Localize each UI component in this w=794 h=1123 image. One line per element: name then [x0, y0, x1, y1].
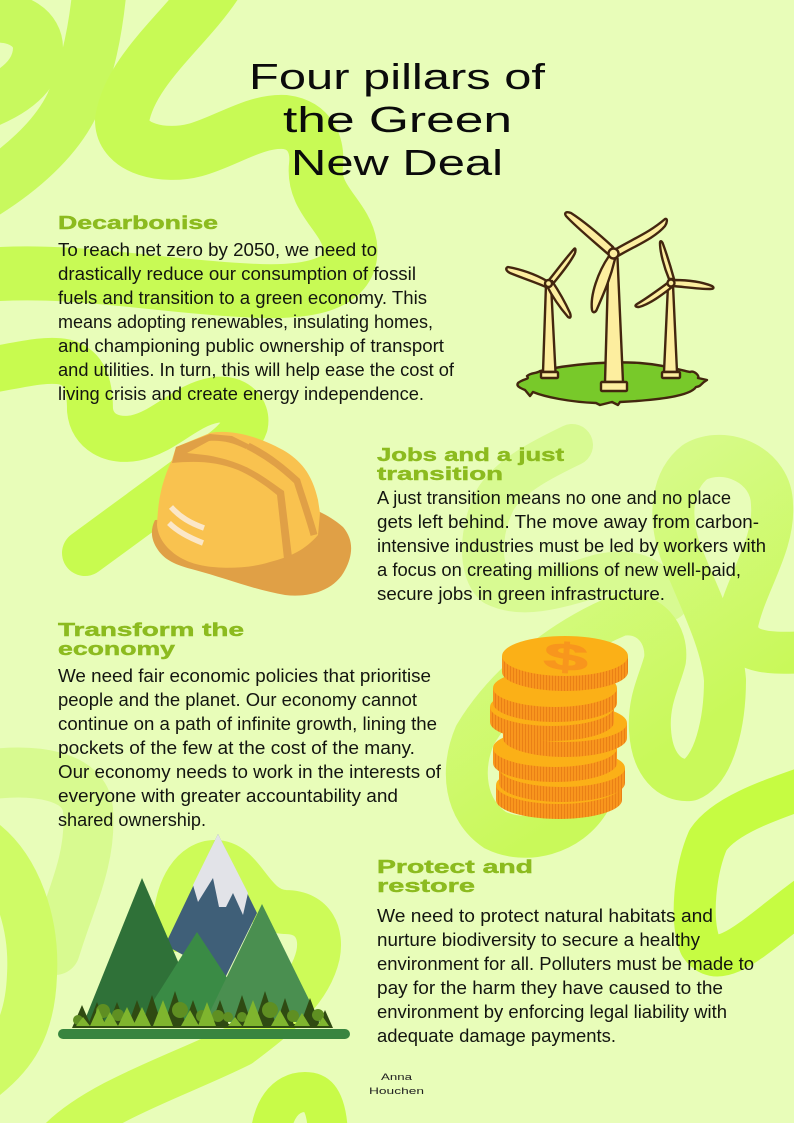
author credit: Houchen	[369, 1086, 424, 1096]
right turbine	[636, 241, 713, 378]
heading: transform the economy: Transform the	[58, 620, 244, 640]
forest	[72, 991, 333, 1028]
heading: protect and restore: Protect and	[377, 857, 533, 877]
author credit: Anna	[381, 1072, 412, 1082]
body: jobs: secure jobs in green infrastructure.	[377, 584, 665, 604]
section: protect and restore	[377, 857, 754, 1046]
coin 7	[496, 766, 622, 819]
body: protect	[377, 906, 754, 1046]
centre turbine	[565, 212, 667, 391]
middle mountain	[140, 932, 256, 1022]
body: protect: environment by enforcing legal liability with	[377, 1002, 727, 1022]
icon: wind turbines	[506, 212, 713, 405]
body: jobs	[377, 488, 766, 604]
body: decarbonise	[58, 240, 455, 404]
coin 5	[493, 729, 617, 782]
body: jobs: A just transition means no one and no place	[377, 488, 731, 508]
heading: protect and restore: restore	[377, 876, 475, 896]
coin 6	[499, 749, 625, 802]
coin 3	[490, 688, 614, 741]
coin 1	[502, 636, 628, 691]
author credit	[369, 1072, 424, 1096]
snow cap	[193, 834, 248, 915]
body: decarbonise: To reach net zero by 2050, we need to	[58, 240, 377, 260]
section: jobs and a just transition	[377, 445, 766, 604]
left mountain	[84, 878, 204, 1022]
icon: hard hat	[152, 432, 351, 596]
body: decarbonise: fuels and transition to a green economy. This	[58, 288, 427, 308]
body: decarbonise: drastically reduce our consumption of fossil	[58, 264, 416, 284]
right mountain	[205, 904, 320, 1022]
body: transform: shared ownership.	[58, 810, 206, 830]
title: the Green	[283, 99, 512, 140]
body: jobs: intensive industries must be led by workers with	[377, 536, 766, 556]
heading: decarbonise: Decarbonise	[58, 213, 218, 233]
body: transform: everyone with greater accountability and	[58, 786, 398, 806]
body: protect: pay for the harm they have caused to the	[377, 978, 723, 998]
body: decarbonise: means adopting renewables, insulating homes,	[58, 312, 433, 332]
body: decarbonise: living crisis and create energy independence.	[58, 384, 424, 404]
heading: jobs and a just transition: transition	[377, 464, 503, 484]
coin 2	[493, 669, 617, 722]
coin 4	[503, 704, 627, 757]
heading: protect and restore	[377, 857, 533, 896]
body: transform: people and the planet. Our economy cannot	[58, 690, 417, 710]
hard hat brim	[152, 512, 351, 596]
hard hat reflection stripes	[169, 507, 204, 543]
body: jobs: a focus on creating millions of new well-paid,	[377, 560, 741, 580]
icon: stack of coins	[490, 634, 628, 819]
heading: transform the economy: economy	[58, 639, 175, 659]
body: protect: adequate damage payments.	[377, 1026, 616, 1046]
hard hat ribs	[172, 434, 314, 559]
title	[249, 56, 546, 183]
icon: mountains and forest	[58, 834, 350, 1039]
title: New Deal	[291, 142, 503, 183]
body: transform: continue on a path of infinite growth, lining the	[58, 714, 437, 734]
body: transform	[58, 666, 442, 830]
hard hat shell	[157, 432, 320, 568]
left turbine	[506, 249, 576, 378]
title: Four pillars of	[249, 56, 546, 97]
heading: jobs and a just transition: Jobs and a just	[377, 445, 564, 465]
section: decarbonise	[58, 213, 455, 404]
body: protect: We need to protect natural habitats and	[377, 906, 713, 926]
turbine ground	[517, 362, 707, 405]
ground bar	[58, 1029, 350, 1039]
body: jobs: gets left behind. The move away from carbon-	[377, 512, 759, 532]
heading: transform the economy	[58, 620, 244, 659]
body: transform: pockets of the few at the cost of the many.	[58, 738, 415, 758]
body: protect: nurture biodiversity to secure a healthy	[377, 930, 700, 950]
body: transform: Our economy needs to work in the interests of	[58, 762, 442, 782]
section: transform the economy	[58, 620, 442, 830]
body: decarbonise: and utilities. In turn, this will help ease the cost of	[58, 360, 455, 380]
dollar sign: $	[542, 634, 590, 680]
body: protect: environment for all. Polluters must be made to	[377, 954, 754, 974]
body: decarbonise: and championing public ownership of transport	[58, 336, 444, 356]
blue peak	[165, 834, 257, 978]
body: transform: We need fair economic policies that prioritise	[58, 666, 431, 686]
heading: jobs and a just transition	[377, 445, 564, 484]
